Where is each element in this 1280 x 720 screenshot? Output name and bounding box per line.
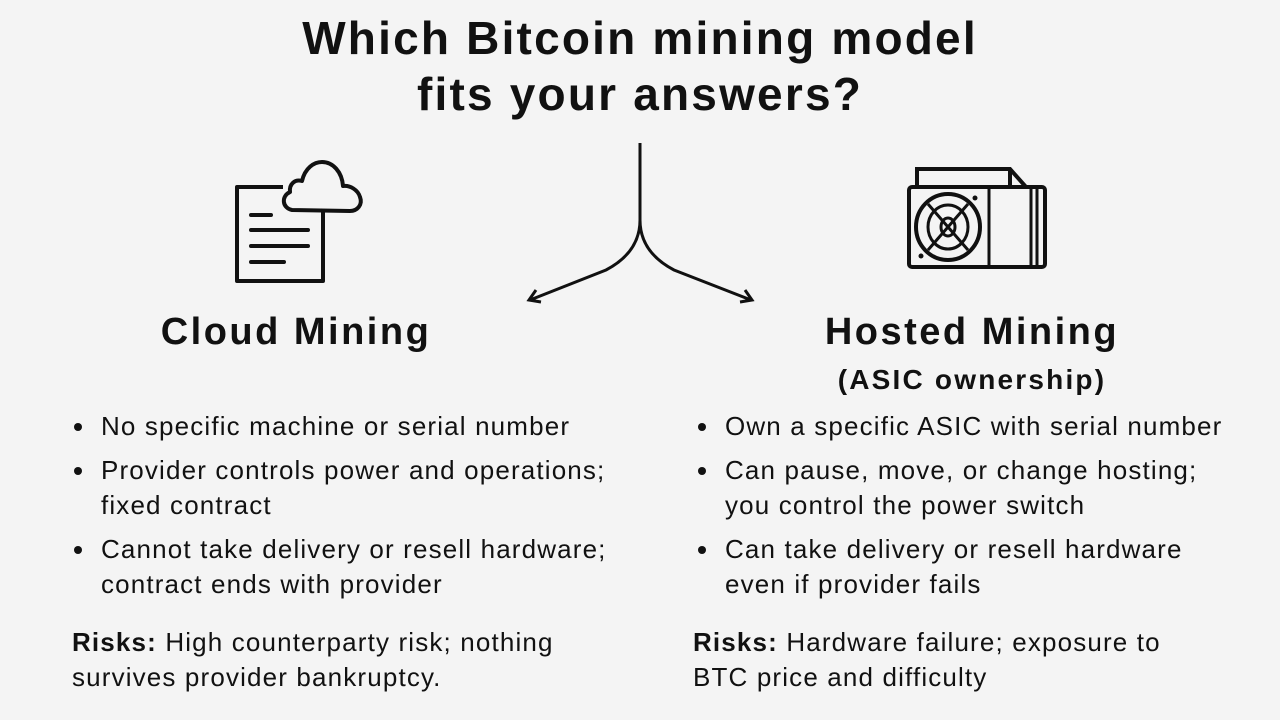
list: hosted mining	[698, 411, 1222, 599]
list: cloud mining: Provider controls power and operations;	[101, 455, 605, 485]
list: hosted mining: Own a specific ASIC with serial number	[725, 411, 1222, 441]
title: Which Bitcoin mining model	[302, 12, 978, 64]
heading: cloud mining: Cloud Mining	[161, 311, 431, 353]
risks: cloud: Risks: High counterparty risk; nothing	[72, 627, 554, 657]
list: cloud mining	[74, 411, 607, 599]
list: hosted mining: even if provider fails	[725, 569, 982, 599]
icon: document with cloud	[235, 160, 363, 283]
risks: hosted	[693, 627, 1161, 692]
heading: hosted mining: (ASIC ownership)	[838, 364, 1106, 395]
list: hosted mining: Can pause, move, or change hosting;	[725, 455, 1197, 485]
list: hosted mining: you control the power switch	[725, 490, 1085, 520]
list: cloud mining: contract ends with provider	[101, 569, 443, 599]
list: hosted mining: Can take delivery or resell hardware	[725, 534, 1183, 564]
risks: hosted: BTC price and difficulty	[693, 662, 987, 692]
arrow: branching	[526, 143, 754, 304]
heading: hosted mining	[825, 311, 1119, 395]
heading: hosted mining: Hosted Mining	[825, 311, 1119, 353]
risks: cloud	[72, 627, 554, 692]
risks: cloud: survives provider bankruptcy.	[72, 662, 442, 692]
list: cloud mining: Cannot take delivery or resell hardware;	[101, 534, 607, 564]
risks: hosted: Risks: Hardware failure; exposure to	[693, 627, 1161, 657]
icon: ASIC miner	[907, 167, 1047, 269]
title	[302, 12, 978, 120]
list: cloud mining: fixed contract	[101, 490, 272, 520]
list: cloud mining: No specific machine or serial number	[101, 411, 570, 441]
title: fits your answers?	[417, 68, 863, 120]
